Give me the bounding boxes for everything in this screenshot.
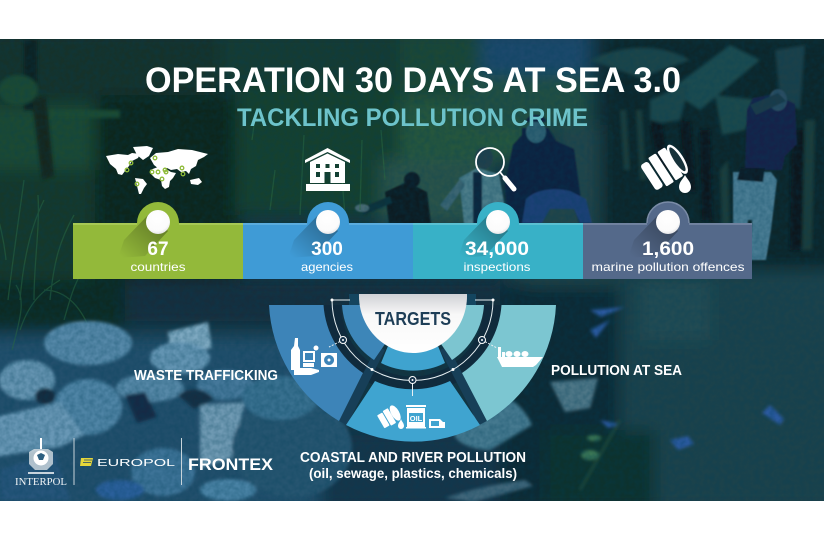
logo: Interpol xyxy=(15,438,67,488)
logo: Interpol: INTERPOL xyxy=(15,476,67,488)
icon: agency building xyxy=(305,148,350,191)
divider xyxy=(74,438,182,485)
label: waste trafficking: WASTE TRAFFICKING xyxy=(134,368,278,384)
panel: 34,000 inspections xyxy=(413,202,583,279)
dark ring band xyxy=(324,305,502,394)
logo: Europol xyxy=(80,457,175,469)
label: pollution at sea: POLLUTION AT SEA xyxy=(551,363,682,379)
targets heading: TARGETS xyxy=(375,309,451,329)
marker xyxy=(146,210,170,234)
marker xyxy=(316,210,340,234)
chart: targets semicircle diagram xyxy=(269,294,556,442)
label: coastal and river pollution xyxy=(300,450,526,481)
connector nodes xyxy=(330,298,494,384)
inner segments xyxy=(342,305,385,360)
icon: world map with location pins xyxy=(106,146,208,194)
label: coastal and river pollution: COASTAL AND RIVER POLLUTION xyxy=(300,450,526,466)
marker xyxy=(656,210,680,234)
icon: oil barrels and can: OIL xyxy=(410,414,423,423)
marker xyxy=(486,210,510,234)
connector line xyxy=(329,300,497,396)
label: inspections xyxy=(464,260,530,274)
icon: oil barrels and can xyxy=(376,404,445,429)
panel: 1,600 marine pollution offences xyxy=(583,202,752,279)
logo: Frontex: FRONTEX xyxy=(188,456,273,474)
label: agencies xyxy=(301,260,353,274)
segment: pollution at sea xyxy=(462,305,556,421)
title: OPERATION 30 DAYS AT SEA 3.0 xyxy=(145,61,681,100)
label: countries xyxy=(130,260,186,274)
icon: ship xyxy=(497,347,543,367)
value: 300 xyxy=(311,239,343,260)
logo: Europol: EUROPOL xyxy=(97,457,175,469)
targets bowl xyxy=(359,294,467,353)
segment dividers xyxy=(343,348,483,423)
panel: 67 countries xyxy=(73,202,243,279)
value: 34,000 xyxy=(465,239,529,260)
label: coastal and river pollution: (oil, sewage, plastics, chemicals) xyxy=(309,466,517,481)
map pins xyxy=(125,156,185,186)
icon: bottles and electronics xyxy=(291,338,337,375)
value: 1,600 xyxy=(642,239,694,260)
label: marine pollution offences xyxy=(592,260,744,274)
icon: magnifying glass xyxy=(476,148,514,189)
panel: 300 agencies xyxy=(243,202,413,279)
segment: coastal and river pollution xyxy=(346,381,480,442)
segment: waste trafficking xyxy=(269,305,363,421)
value: 67 xyxy=(147,239,169,260)
subtitle: TACKLING POLLUTION CRIME xyxy=(237,104,588,132)
icon: leaking oil barrel xyxy=(639,142,692,193)
